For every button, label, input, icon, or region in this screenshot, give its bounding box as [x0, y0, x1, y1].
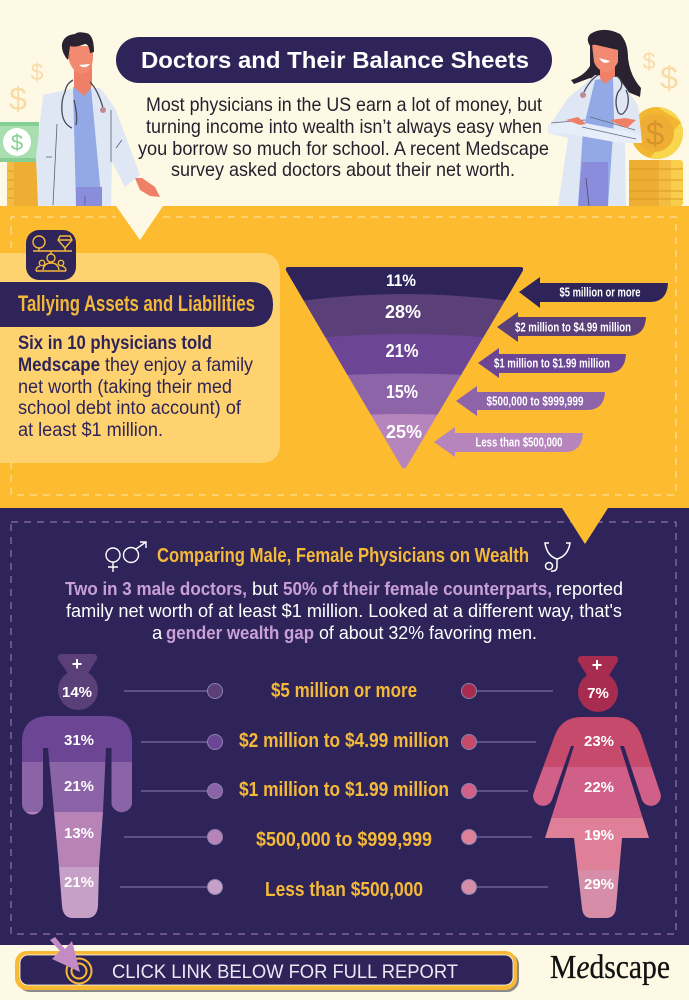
arrow: $1 million to $1.99 million: $1 million to $1.99 million: [494, 356, 610, 370]
arrow: $5 million or more: $5 million or more: [560, 286, 641, 300]
logo: Medscape: Medscape: [550, 949, 670, 986]
icon: stethoscope: [545, 543, 570, 571]
female figure chart: 23%: [584, 733, 614, 750]
header background: [0, 0, 689, 206]
yellow pointer: [562, 508, 608, 544]
body text: gender wealth gap: reported: [556, 578, 623, 599]
body text: gender wealth gap: [65, 578, 623, 643]
icon: dollar signs right: $: [660, 60, 678, 96]
icon: scales with assets: [26, 230, 76, 280]
body text: gender wealth gap: Two in 3 male doctors,: [65, 578, 247, 599]
icon: purple arrow: [50, 937, 80, 972]
intro text: you borrow so much for school. A recent Medscape: [138, 138, 549, 160]
male figure chart: 14%: [62, 684, 92, 701]
icon: banknote and coins left: [0, 122, 39, 206]
funnel chart: 28%: [385, 301, 421, 322]
female figure chart: 29%: [584, 876, 614, 893]
arrow: $2 million to $4.99 million: $2 million to $4.99 million: [515, 320, 631, 334]
male figure chart: [20, 654, 135, 919]
body text: gender wealth gap: 50% of their female counterparts,: [283, 578, 552, 599]
female figure chart: 7%: [587, 685, 609, 702]
intro text: Most physicians in the US earn a lot of money, but: [146, 94, 543, 116]
female figure chart: [530, 655, 665, 919]
wealth bracket labels: $5 million or more: [271, 680, 417, 702]
icon: dollar signs right: [643, 48, 678, 96]
heading: tallying assets: [0, 282, 273, 327]
connector lines right: [477, 691, 553, 887]
funnel chart: 11%: [386, 271, 416, 290]
icon: male doctor: [36, 32, 160, 206]
body text: gender wealth gap: of about 32% favoring men.: [319, 622, 537, 643]
connector lines left: [120, 691, 207, 887]
button: click link: CLICK LINK BELOW FOR FULL REPORT: [112, 961, 458, 983]
panel: assets and liabilities background: [0, 206, 689, 508]
funnel chart: [286, 267, 524, 468]
body text: six in 10: they enjoy a family: [105, 355, 253, 376]
arrow: $2 million to $4.99 million: [497, 312, 646, 342]
icon: dollar signs left: [9, 59, 44, 117]
body text: gender wealth gap: gender wealth gap: [166, 622, 314, 643]
arrow: less than $500,000: Less than $500,000: [476, 436, 563, 450]
wealth bracket labels: $500,000 to $999,999: [256, 829, 432, 851]
title: Doctors and Their Balance Sheets: [141, 47, 529, 73]
icon: gender symbols: [106, 542, 146, 572]
body text: gender wealth gap: but: [252, 578, 278, 599]
panel: gender comparison background: [0, 508, 689, 945]
wealth bracket labels: Less than $500,000: [265, 879, 423, 901]
female figure chart: 22%: [584, 779, 614, 796]
arrow: $500,000 to $999,999: $500,000 to $999,999: [486, 394, 584, 408]
female figure chart: 19%: [584, 827, 614, 844]
male figure chart: +: [72, 654, 82, 674]
male figure chart: 21%: [64, 874, 94, 891]
body text: gender wealth gap: family net worth of at least $1 million. Looked at a different way, that's: [66, 600, 622, 621]
male figure chart: 21%: [64, 778, 94, 795]
intro text: survey asked doctors about their net worth.: [171, 159, 515, 181]
funnel chart: 15%: [386, 381, 418, 402]
male figure chart: 13%: [64, 825, 94, 842]
male figure chart: 31%: [64, 732, 94, 749]
body text: six in 10: [18, 333, 253, 441]
wealth bracket labels: $1 million to $1.99 million: [239, 779, 449, 801]
icon: dollar signs right: $: [643, 48, 656, 74]
funnel chart: 25%: [386, 421, 422, 442]
icon: dollar signs left: $: [9, 81, 27, 117]
icon: female doctor: [548, 30, 642, 206]
icon: coins right: [629, 107, 683, 206]
icon: click target: [66, 958, 92, 984]
arrow: less than $500,000: [434, 427, 583, 457]
arrow: $1 million to $1.99 million: [478, 348, 626, 378]
body text: six in 10: Medscape: [18, 355, 100, 376]
heading: tallying assets: Tallying Assets and Liabilities: [18, 291, 255, 316]
body text: six in 10: Six in 10 physicians told: [18, 333, 212, 354]
body text: six in 10: school debt into account) of: [18, 398, 242, 419]
body text: gender wealth gap: a: [152, 622, 163, 643]
heading: comparing male, female: Comparing Male, Female Physicians on Wealth: [157, 545, 529, 567]
intro text: [138, 94, 549, 181]
connector markers right: [462, 684, 476, 894]
funnel chart: 21%: [386, 340, 418, 361]
icon: dollar signs left: $: [31, 59, 44, 85]
title: [116, 37, 552, 83]
icon: coins right: $: [646, 115, 664, 152]
icon: banknote and coins left: $: [11, 130, 23, 155]
wealth bracket labels: $2 million to $4.99 million: [239, 730, 449, 752]
body text: six in 10: net worth (taking their med: [18, 377, 232, 398]
cream pointer: [116, 206, 163, 240]
arrow: $5 million or more: [519, 277, 668, 308]
wealth bracket labels: [239, 680, 449, 901]
arrow: $500,000 to $999,999: [456, 386, 605, 416]
body text: six in 10: at least $1 million.: [18, 420, 163, 441]
button: click link: [15, 951, 519, 992]
connector markers left: [208, 684, 222, 894]
panel: text card: [0, 253, 280, 463]
female figure chart: +: [592, 655, 602, 675]
intro text: turning income into wealth isn’t always easy when: [146, 116, 542, 138]
footer background: [0, 945, 689, 1000]
